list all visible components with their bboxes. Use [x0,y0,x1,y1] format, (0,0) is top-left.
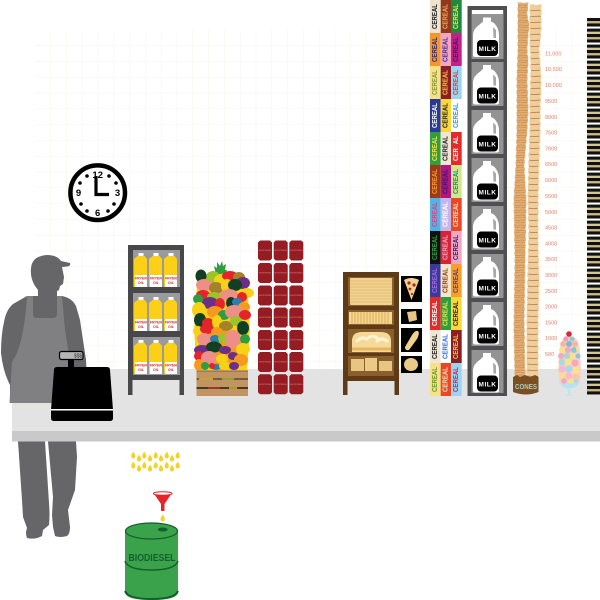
cereal boxes: CEREAL [442,36,449,62]
milk shelf: MILK [479,382,496,388]
ice cream sundae [558,331,581,396]
cereal boxes: CEREAL [442,102,449,128]
red cans: SHORTENING [259,317,272,319]
cereal boxes: CEREAL [453,102,460,128]
oil shelf: FRYER [150,276,162,280]
height scale [545,52,562,358]
clock icon: 3 [115,188,120,199]
cereal boxes: CEREAL [432,234,439,260]
cereal boxes: CEREAL [453,333,460,359]
height scale: 1500 [545,320,557,326]
cereal boxes: CEREAL [442,234,449,260]
red cans: SHORTENING [274,362,288,364]
red cans: SHORTENING [290,340,303,342]
cereal boxes: CEREAL [432,36,439,62]
oil shelf: FRYER [135,364,147,368]
oil shelf: OIL [153,281,160,285]
cereal boxes: CEREAL [453,201,460,227]
clock icon: 6 [95,208,100,219]
red cans: SHORTENING [290,317,303,319]
bread shelf [343,272,399,395]
cones box [513,375,538,394]
milk shelf: MILK [479,334,496,340]
cereal boxes [430,0,462,396]
height scale: 4000 [545,242,557,248]
milk shelf: MILK [479,46,496,53]
height scale: 1000 [545,336,557,342]
red cans: SHORTENING [274,250,288,252]
falling oil drops [131,452,180,472]
red cans: SHORTENING [274,295,288,297]
biodiesel barrel [125,523,178,600]
red cans: SHORTENING [290,295,303,297]
height scale: 6500 [545,162,557,168]
oil shelf: OIL [168,368,175,372]
cereal boxes: CEREAL [442,168,449,194]
oil shelf: OIL [168,325,175,329]
red cans: SHORTENING [259,384,272,386]
cereal boxes: CEREAL [453,300,460,326]
oil shelf [128,245,184,395]
cereal boxes: CEREAL [432,69,439,95]
oil shelf: OIL [168,281,175,285]
cereal boxes: CEREAL [453,69,460,95]
cereal boxes: CEREAL [432,201,439,227]
cereal boxes: CEREAL [442,3,449,29]
pizza, toast, baguette and roll [401,276,422,373]
milk shelf: MILK [479,190,496,196]
height scale: 11,000 [545,52,561,58]
height scale: 6000 [545,178,557,184]
height scale: 10,000 [545,83,562,89]
oil shelf: FRYER [150,364,162,368]
height scale: 500 [545,352,554,358]
fruit pile [192,261,254,371]
height scale: 9500 [545,99,557,105]
milk shelf: MILK [479,94,496,100]
oil shelf: OIL [153,325,160,329]
worker silhouette [1,255,87,539]
height scale: 10,500 [545,67,562,73]
clock icon [70,165,125,220]
height scale: 5000 [545,210,557,216]
height scale: 8000 [545,115,557,121]
cereal boxes: CEREAL [432,135,439,161]
milk shelf: MILK [479,238,496,244]
background grid [35,30,600,370]
red cans: SHORTENING [274,340,288,342]
cereal boxes: CEREAL [453,366,460,392]
oil shelf: FRYER [135,320,147,324]
red cans: SHORTENING [274,317,288,319]
cereal boxes: CEREAL [442,333,449,359]
red cans: SHORTENING [274,384,288,386]
height scale: 2500 [545,289,557,295]
oil shelf: OIL [138,368,145,372]
milk shelf [468,6,507,396]
cereal boxes: CEREAL [453,135,460,161]
ice cream cone stacks [514,3,541,378]
red cans: SHORTENING [290,362,303,364]
height scale: 4500 [545,226,557,232]
cereal boxes: CEREAL [453,234,460,260]
oil shelf: FRYER [165,320,177,324]
height scale: 3500 [545,257,557,263]
oil shelf: OIL [138,281,145,285]
striped stack at right edge [587,18,600,395]
milk shelf: MILK [479,286,496,292]
funnel [153,492,172,522]
height scale: 7000 [545,146,557,152]
cereal boxes: CEREAL [453,168,460,194]
cones box: CONES [515,382,537,391]
oil shelf: OIL [153,368,160,372]
oil shelf: OIL [138,325,145,329]
height scale: 7500 [545,130,557,136]
cereal boxes: CEREAL [432,366,439,392]
red cans: SHORTENING [290,250,303,252]
height scale: 2000 [545,304,557,310]
cereal boxes: CEREAL [432,300,439,326]
red cans: SHORTENING [259,250,272,252]
cereal boxes: CEREAL [442,267,449,293]
clock icon: 9 [76,188,81,199]
red cans: SHORTENING [259,295,272,297]
biodiesel barrel: BIODIESEL [128,552,176,564]
cereal boxes: CEREAL [442,135,449,161]
clock icon: 12 [92,170,103,181]
height scale: 5500 [545,194,557,200]
red cans: SHORTENING [259,340,272,342]
counter [12,369,600,442]
cash register [51,352,113,421]
cereal boxes: CEREAL [442,366,449,392]
cereal boxes: CEREAL [442,201,449,227]
oil shelf: FRYER [165,364,177,368]
cereal boxes: CEREAL [432,102,439,128]
cereal boxes: CEREAL [432,168,439,194]
cereal boxes: CEREAL [432,333,439,359]
red cans: SHORTENING [259,272,272,274]
height scale: 3000 [545,273,557,279]
cereal boxes: CEREAL [453,267,460,293]
cereal boxes: CEREAL [432,267,439,293]
cereal boxes: CEREAL [453,36,460,62]
red cans: SHORTENING [290,272,303,274]
fruit crate [196,370,248,396]
red cans: SHORTENING [290,384,303,386]
cereal boxes: CEREAL [453,3,460,29]
red cans [258,240,303,394]
oil shelf: FRYER [150,320,162,324]
cereal boxes: CEREAL [442,300,449,326]
cereal boxes: CEREAL [432,3,439,29]
oil shelf: FRYER [165,276,177,280]
oil shelf: FRYER [135,276,147,280]
cash register: $$$ [74,354,82,360]
milk shelf: MILK [479,142,496,148]
cereal boxes: CEREAL [442,69,449,95]
red cans: SHORTENING [274,272,288,274]
red cans: SHORTENING [259,362,272,364]
